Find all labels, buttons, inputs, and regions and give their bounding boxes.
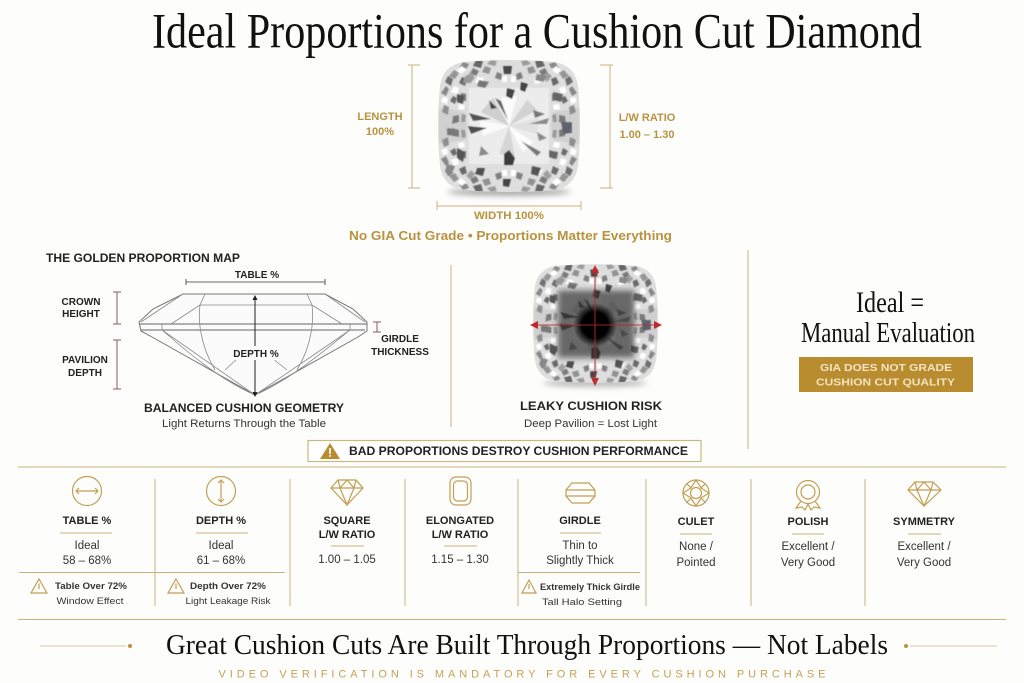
girdle warning: Tall Halo Setting — [542, 597, 622, 608]
symmetry value: Very Good — [897, 557, 951, 569]
table underline — [60, 532, 112, 534]
panel heading: THE GOLDEN PROPORTION MAP — [46, 253, 240, 265]
elongated underline — [444, 545, 477, 547]
crown bracket — [113, 292, 121, 324]
icon: table width — [72, 476, 102, 506]
manual evaluation heading: Manual Evaluation — [801, 318, 975, 349]
girdle value: Slightly Thick — [546, 555, 614, 567]
symmetry value — [897, 541, 951, 569]
girdle label: THICKNESS — [371, 347, 429, 358]
metric: symmetry — [893, 482, 956, 569]
panel: manual evaluation — [799, 286, 975, 392]
symmetry value: Excellent / — [897, 541, 951, 553]
dark center — [558, 290, 634, 358]
culet value: Pointed — [676, 557, 716, 569]
leaky subcaption: Deep Pavilion = Lost Light — [524, 418, 657, 430]
black culet — [573, 303, 617, 347]
depth warning — [168, 579, 271, 607]
girdle heading: GIRDLE — [559, 515, 601, 527]
polish heading: POLISH — [788, 516, 829, 528]
icon: diamond — [908, 482, 941, 506]
diamond image — [438, 60, 580, 192]
icon: girdle — [566, 483, 595, 503]
diamond side profile — [139, 294, 367, 395]
table value: 58 – 68% — [63, 555, 111, 567]
square heading — [319, 515, 376, 541]
polish underline — [792, 533, 824, 535]
icon: diamond — [331, 480, 363, 505]
footer ornament: left — [40, 644, 132, 648]
ideal heading: Ideal = — [856, 286, 924, 319]
warning text: BAD PROPORTIONS DESTROY CUSHION PERFORMANCE — [349, 446, 688, 458]
girdle warning: Extremely Thick Girdle — [540, 582, 640, 593]
diamond shadow — [447, 188, 571, 196]
panel: top diamond with dimensions — [349, 60, 676, 243]
gold subtitle: No GIA Cut Grade • Proportions Matter Everything — [349, 228, 672, 243]
girdle label — [371, 334, 429, 358]
girdle value — [546, 540, 614, 567]
elongated heading: ELONGATED — [426, 515, 494, 527]
width bracket — [437, 201, 581, 210]
width label: WIDTH 100% — [474, 210, 544, 222]
leak shadow — [543, 379, 647, 387]
girdle warning — [522, 580, 640, 608]
leaky caption: LEAKY CUSHION RISK — [520, 399, 662, 413]
length label — [357, 111, 403, 138]
depth heading: DEPTH % — [196, 515, 246, 527]
panel: leaky cushion — [520, 264, 662, 430]
divider: right — [747, 250, 749, 449]
ratio label: L/W RATIO — [619, 112, 676, 124]
depth value: Ideal — [209, 540, 233, 552]
gold badge: CUSHION CUT QUALITY — [816, 376, 955, 388]
ratio label: 1.00 – 1.30 — [619, 129, 675, 141]
crown label: HEIGHT — [62, 309, 100, 320]
crown label — [62, 297, 100, 320]
metric: culet — [676, 480, 716, 569]
depth arrow heads — [252, 295, 258, 397]
depth arrow — [254, 297, 256, 395]
pavilion label — [62, 355, 108, 379]
square value: 1.00 – 1.05 — [318, 554, 376, 566]
warning banner — [308, 440, 701, 462]
ratio label — [619, 112, 676, 141]
table heading: TABLE % — [63, 515, 112, 527]
depth underline — [196, 532, 248, 534]
symmetry underline — [908, 533, 941, 535]
table arrow — [186, 279, 325, 285]
ratio bracket — [600, 65, 613, 188]
table warning — [31, 579, 128, 607]
table warning: Table Over 72% — [55, 581, 128, 592]
leaky diamond — [533, 264, 658, 383]
metric: girdle — [522, 483, 640, 608]
elongated heading — [426, 515, 494, 541]
depth warning: Depth Over 72% — [190, 581, 267, 592]
metric: polish — [781, 480, 835, 569]
polish value: Excellent / — [781, 541, 835, 553]
girdle underline — [560, 532, 601, 534]
crown label: CROWN — [62, 297, 100, 308]
girdle bracket — [373, 322, 381, 332]
table rules — [18, 467, 1006, 620]
table value — [63, 540, 111, 567]
metric: square ratio — [318, 480, 376, 566]
polish value: Very Good — [781, 557, 835, 569]
square heading: L/W RATIO — [319, 529, 376, 541]
polish value — [781, 541, 835, 569]
depth value — [197, 540, 245, 567]
length bracket — [408, 65, 420, 188]
girdle value: Thin to — [562, 540, 598, 552]
gold badge: GIA DOES NOT GRADE — [820, 362, 952, 374]
metric: elongated ratio — [426, 477, 494, 566]
icon: elongated cushion — [450, 477, 471, 505]
icon: culet — [683, 480, 709, 506]
culet value — [676, 541, 716, 569]
footer ornament: right — [904, 644, 997, 648]
depth label: DEPTH % — [233, 349, 279, 360]
icon: depth — [206, 476, 236, 506]
culet underline — [680, 533, 712, 535]
symmetry heading: SYMMETRY — [893, 516, 956, 528]
length label: LENGTH — [357, 111, 403, 123]
table value: Ideal — [75, 540, 99, 552]
metric: table — [31, 476, 128, 607]
geometry caption: BALANCED CUSHION GEOMETRY — [144, 401, 344, 415]
table label: TABLE % — [235, 270, 279, 281]
depth warning: Light Leakage Risk — [186, 596, 271, 607]
pavilion label: DEPTH — [68, 368, 102, 379]
square underline — [331, 545, 364, 547]
pavilion label: PAVILION — [62, 355, 108, 366]
geometry subcaption: Light Returns Through the Table — [162, 418, 326, 430]
footer note: VIDEO VERIFICATION IS MANDATORY FOR EVERY CUSHION PURCHASE — [218, 668, 826, 680]
girdle label: GIRDLE — [381, 334, 419, 345]
culet heading: CULET — [678, 516, 715, 528]
elongated value: 1.15 – 1.30 — [431, 554, 489, 566]
culet value: None / — [679, 541, 714, 553]
footer headline: Great Cushion Cuts Are Built Through Proportions — Not Labels — [166, 630, 888, 661]
icon: rosette — [796, 480, 820, 510]
panel: golden proportion map — [46, 253, 429, 430]
square heading: SQUARE — [323, 515, 371, 527]
length label: 100% — [366, 126, 394, 138]
divider: left — [450, 265, 452, 427]
warning icon — [320, 443, 340, 459]
red arrows — [530, 265, 662, 386]
pavilion bracket — [113, 340, 121, 389]
elongated heading: L/W RATIO — [432, 529, 489, 541]
depth value: 61 – 68% — [197, 555, 245, 567]
table warning: Window Effect — [56, 596, 124, 607]
gold badge — [799, 357, 973, 392]
metric: depth — [168, 476, 271, 607]
